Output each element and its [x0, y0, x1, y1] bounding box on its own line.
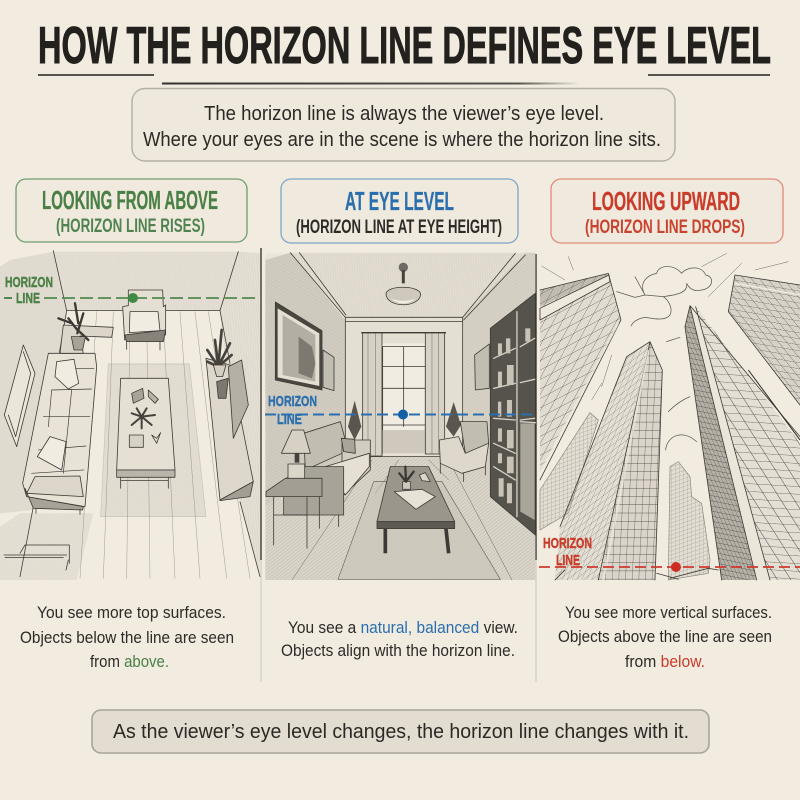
- bookcase: [490, 293, 535, 535]
- caption: looking upward: You see more vertical surfaces.: [565, 604, 772, 622]
- caption: looking from above: Objects below the line are seen: [20, 629, 234, 647]
- intro text box: The horizon line is always the viewer’s eye level.: [204, 103, 604, 125]
- caption: looking from above: [20, 604, 234, 671]
- caption: looking upward: [558, 604, 772, 671]
- sofa: [23, 353, 97, 514]
- panel heading: looking from above: (HORIZON LINE RISES): [56, 216, 205, 237]
- lamp on side table: [266, 430, 322, 548]
- bottom takeaway banner: As the viewer’s eye level changes, the horizon line changes with it.: [113, 721, 689, 743]
- horizon line: red, low: HORIZON: [543, 535, 592, 552]
- horizon line: red, low: LINE: [556, 552, 580, 569]
- horizon line: red, low: [539, 535, 800, 572]
- panel heading: at eye level: AT EYE LEVEL: [345, 186, 454, 216]
- caption: looking upward: from below.: [625, 653, 705, 671]
- back towers: [540, 413, 710, 580]
- intro text box: [132, 88, 675, 161]
- coffee table with items: [117, 378, 175, 488]
- horizon line: green, high: [4, 274, 257, 307]
- centre-left tower: [555, 342, 662, 580]
- horizon line: blue, at eye level: LINE: [277, 411, 302, 428]
- panel heading: at eye level: [281, 179, 518, 243]
- ceiling lamp: [386, 263, 421, 305]
- wall picture: [4, 345, 35, 447]
- foreground rooftop at horizon: [555, 568, 718, 580]
- sofa: [284, 422, 370, 527]
- caption: at eye level: Objects align with the horizon line.: [281, 642, 515, 660]
- panel heading: looking from above: LOOKING FROM ABOVE: [42, 185, 218, 215]
- panel dividers: [261, 248, 536, 560]
- walls, ceiling and floor: [265, 253, 535, 580]
- caption: looking from above: from above.: [90, 653, 169, 671]
- media console with plant and screen: [206, 330, 253, 501]
- panel heading: looking from above: [16, 179, 247, 242]
- caption: at eye level: You see a natural, balanced view.: [288, 619, 518, 637]
- intro text box: Where your eyes are in the scene is where the horizon line sits.: [143, 129, 661, 151]
- horizon line: green, high: LINE: [16, 290, 40, 307]
- armchair: [123, 290, 166, 350]
- centre-right tower: [685, 306, 800, 580]
- rug: [101, 364, 206, 517]
- back wall and side walls: [0, 251, 260, 580]
- caption: looking upward: Objects above the line are seen: [558, 628, 772, 646]
- bottom takeaway banner: [92, 710, 709, 753]
- panel heading: at eye level: (HORIZON LINE AT EYE HEIGHT): [296, 217, 502, 238]
- illustration: room at eye level: [265, 253, 535, 580]
- panel heading: looking upward: [551, 179, 783, 243]
- bench at the bottom: [4, 545, 69, 570]
- illustration: room seen from above: [0, 251, 260, 580]
- armchair: [439, 422, 489, 482]
- left upper tower: [540, 273, 621, 480]
- side table, plant and shelf back-left: [58, 303, 113, 353]
- rug and coffee table: [338, 467, 500, 579]
- clouds: [542, 253, 788, 450]
- wall pictures: [275, 302, 489, 391]
- illustration: skyscrapers looking upward: [540, 253, 800, 580]
- horizon line: blue, at eye level: HORIZON: [268, 393, 317, 410]
- caption: looking from above: You see more top surfaces.: [37, 604, 226, 622]
- right upper tower: [728, 275, 800, 405]
- horizon line: blue, at eye level: [265, 393, 535, 428]
- window with curtains: [361, 333, 446, 456]
- caption: at eye level: [281, 619, 518, 660]
- horizon line: green, high: HORIZON: [5, 274, 53, 291]
- plants beside the window: [348, 401, 461, 440]
